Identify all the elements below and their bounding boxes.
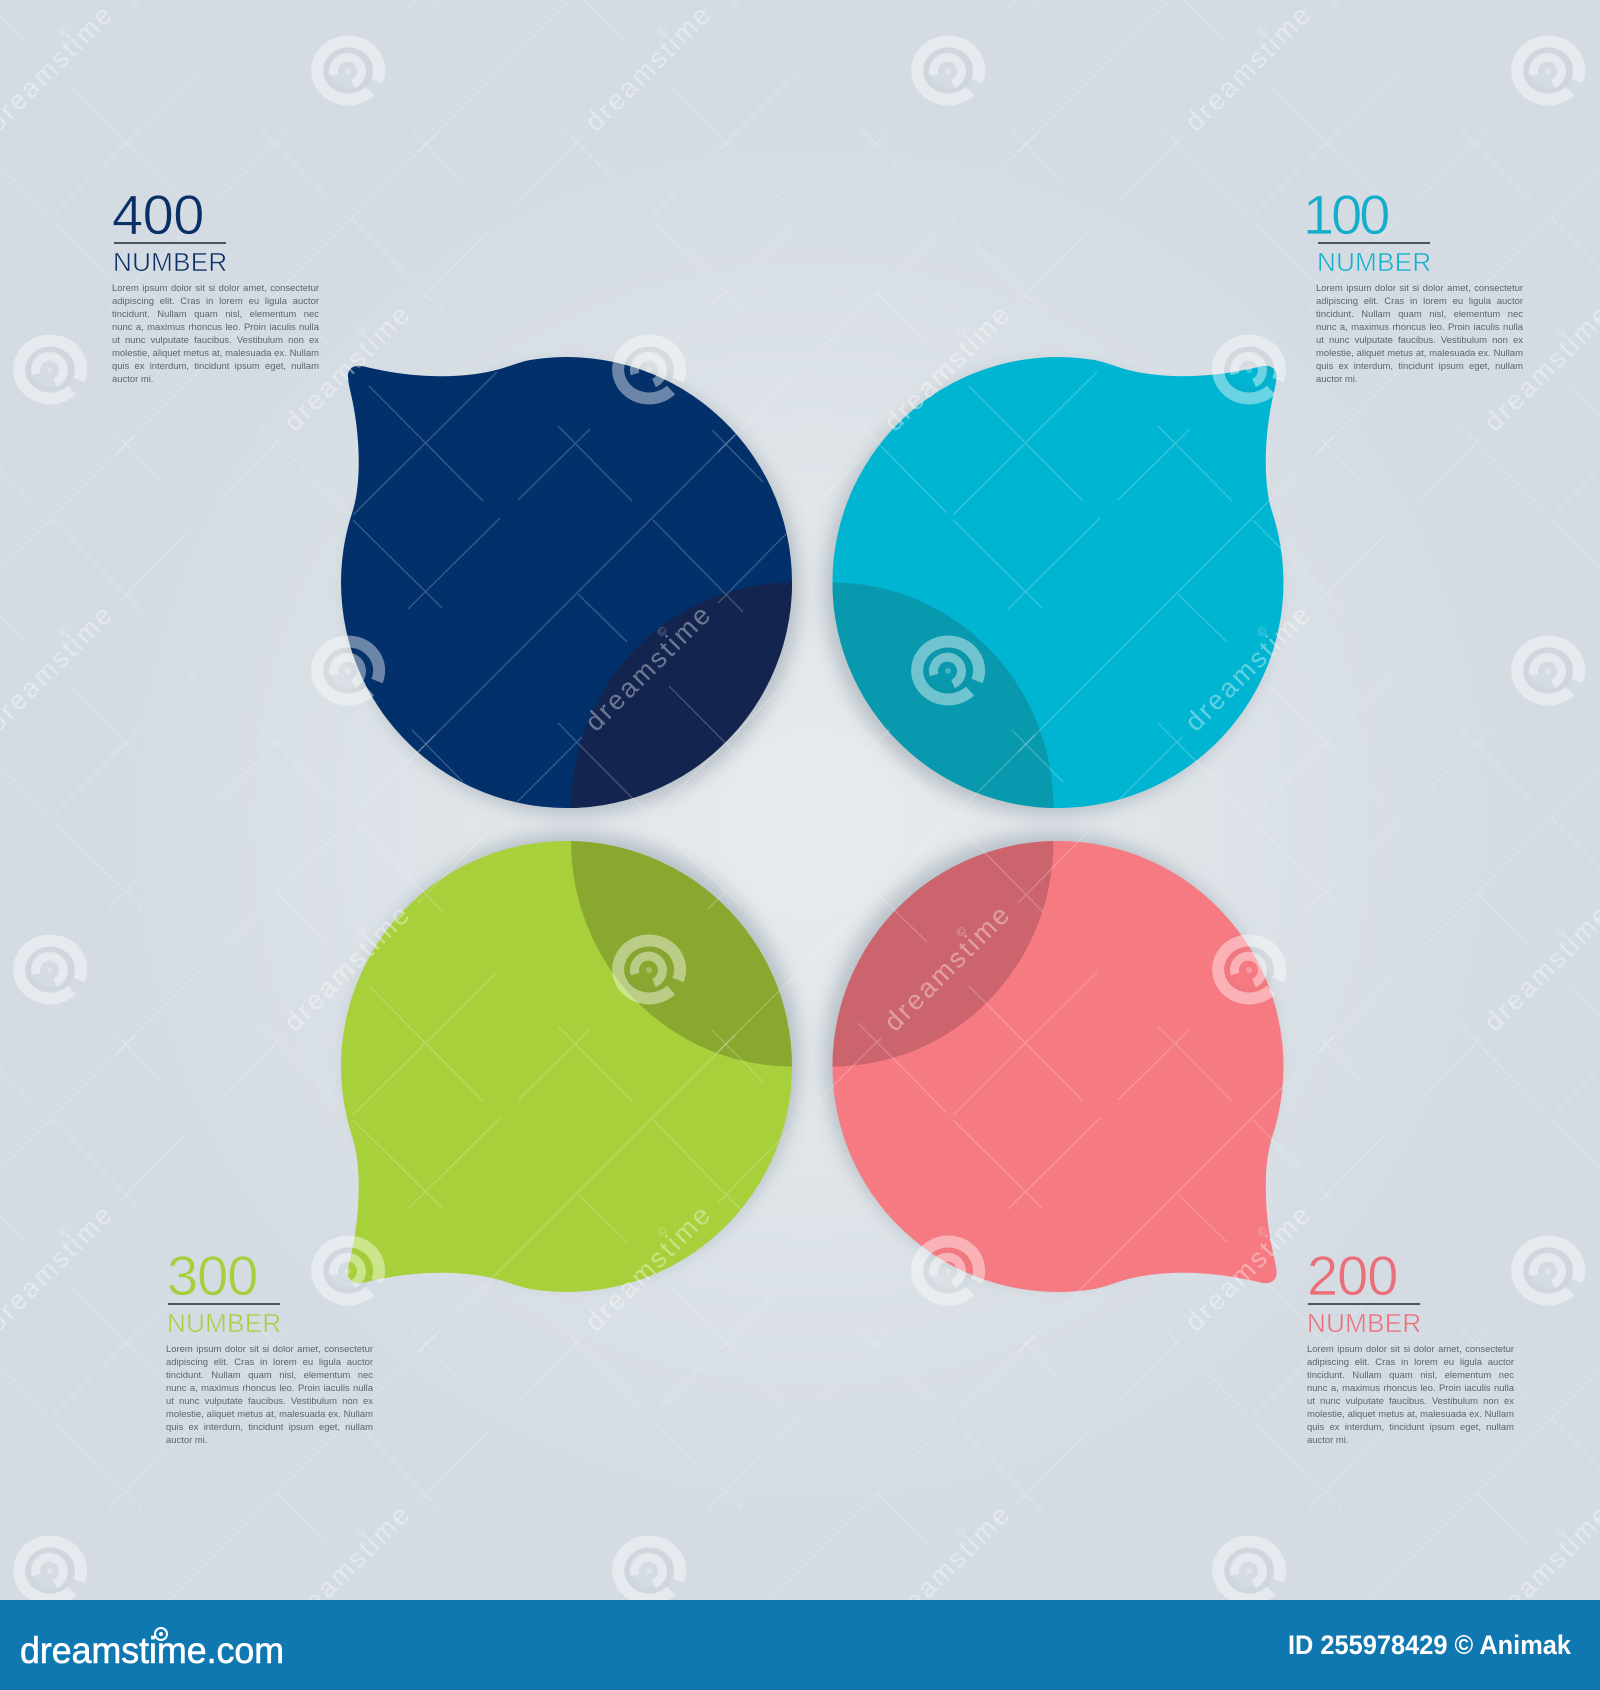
watermark: dreamstime text: © <box>953 1523 969 1540</box>
text block: 400 number, navy: Lorem ipsum dolor sit si dolor amet, consectetur <box>112 283 319 294</box>
text block: 300 number, green <box>166 1244 373 1446</box>
bubble: green, bottom left <box>341 841 792 1292</box>
text block: 300 number, green: nunc a, maximus rhoncus leo. Proin iaculis nulla <box>166 1383 373 1394</box>
text block: 200 number, pink: 200 <box>1307 1244 1397 1307</box>
text block: 400 number, navy: tincidunt. Nullam quam nisl, elementum nec <box>112 309 319 320</box>
watermark: dreamstime text: © <box>1254 623 1270 640</box>
watermark: dreamstime text: © <box>56 23 72 40</box>
text block: 300 number, green: quis ex interdum, tincidunt ipsum eget, nullam <box>166 1422 373 1433</box>
watermark: dreamstime text: dreamstime <box>579 0 716 137</box>
watermark: dreamstime text: © <box>1254 23 1270 40</box>
watermark: dreamstime text: dreamstime <box>579 600 716 737</box>
watermark: dreamstime text: dreamstime <box>278 900 415 1037</box>
watermark: dreamstime text: © <box>1254 1223 1270 1240</box>
watermark: dreamstime text: © <box>654 1223 670 1240</box>
watermark: dreamstime text: © <box>654 23 670 40</box>
watermark: dreamstime text: dreamstime <box>878 900 1015 1037</box>
text block: 100 number, cyan: nunc a, maximus rhoncus leo. Proin iaculis nulla <box>1316 322 1523 333</box>
text block: 400 number, navy <box>112 183 319 385</box>
text block: 300 number, green: tincidunt. Nullam quam nisl, elementum nec <box>166 1370 373 1381</box>
watermark: dreamstime text: © <box>654 623 670 640</box>
text block: 300 number, green: ut nunc vulputate faucibus. Vestibulum non ex <box>166 1396 373 1407</box>
text block: 100 number, cyan: adipiscing elit. Cras in lorem eu ligula auctor <box>1316 296 1523 307</box>
watermark: dreamstime text: dreamstime <box>878 1500 1015 1637</box>
text block: 100 number, cyan: quis ex interdum, tincidunt ipsum eget, nullam <box>1316 361 1523 372</box>
text block: 100 number, cyan: Lorem ipsum dolor sit si dolor amet, consectetur <box>1316 283 1523 294</box>
text block: 400 number, navy: nunc a, maximus rhoncus leo. Proin iaculis nulla <box>112 322 319 333</box>
text block: 200 number, pink: molestie, aliquet metus at, malesuada ex. Nullam <box>1307 1409 1514 1420</box>
footer bar: ID 255978429 © Animak <box>1288 1630 1571 1660</box>
bubble: pink, bottom right <box>832 841 1284 1292</box>
watermark: dreamstime text: dreamstime <box>579 1200 716 1337</box>
text block: 400 number, navy: quis ex interdum, tincidunt ipsum eget, nullam <box>112 361 319 372</box>
text block: 200 number, pink: adipiscing elit. Cras in lorem eu ligula auctor <box>1307 1357 1514 1368</box>
text block: 200 number, pink: auctor mi. <box>1307 1435 1348 1446</box>
watermark: dreamstime text: © <box>1553 1523 1569 1540</box>
watermark: dreamstime text: dreamstime <box>1179 1200 1316 1337</box>
footer bar <box>0 1600 1600 1690</box>
text block: 200 number, pink: quis ex interdum, tincidunt ipsum eget, nullam <box>1307 1422 1514 1433</box>
text block: 200 number, pink: tincidunt. Nullam quam nisl, elementum nec <box>1307 1370 1514 1381</box>
bubble: cyan, top right <box>832 357 1284 808</box>
watermark: dreamstime text: dreamstime <box>1179 0 1316 137</box>
bubble: navy, top left <box>341 357 792 808</box>
text block: 300 number, green: molestie, aliquet metus at, malesuada ex. Nullam <box>166 1409 373 1420</box>
watermark: dreamstime text: dreamstime <box>1179 600 1316 737</box>
text block: 400 number, navy: NUMBER <box>113 247 227 277</box>
watermark: dreamstime text: © <box>953 923 969 940</box>
watermark: dreamstime text: © <box>1553 923 1569 940</box>
watermark: dreamstime text: © <box>1553 323 1569 340</box>
text block: 300 number, green: Lorem ipsum dolor sit si dolor amet, consectetur <box>166 1344 373 1355</box>
text block: 200 number, pink: ut nunc vulputate faucibus. Vestibulum non ex <box>1307 1396 1514 1407</box>
watermark: dreamstime text: dreamstime <box>878 300 1015 437</box>
watermark: dreamstime text: © <box>953 323 969 340</box>
text block: 400 number, navy: molestie, aliquet metus at, malesuada ex. Nullam <box>112 348 319 359</box>
text block: 100 number, cyan <box>1303 183 1523 385</box>
text block: 200 number, pink: nunc a, maximus rhoncus leo. Proin iaculis nulla <box>1307 1383 1514 1394</box>
watermark: dreamstime text: © <box>353 1523 369 1540</box>
text block: 400 number, navy: ut nunc vulputate faucibus. Vestibulum non ex <box>112 335 319 346</box>
watermark: dreamstime text: © <box>353 323 369 340</box>
text block: 100 number, cyan: NUMBER <box>1317 247 1431 277</box>
text block: 400 number, navy: 400 <box>112 183 204 246</box>
text block: 300 number, green: auctor mi. <box>166 1435 207 1446</box>
text block: 100 number, cyan: 100 <box>1303 183 1387 246</box>
text block: 300 number, green: NUMBER <box>167 1308 281 1338</box>
text block: 200 number, pink: Lorem ipsum dolor sit si dolor amet, consectetur <box>1307 1344 1514 1355</box>
text block: 200 number, pink: NUMBER <box>1307 1308 1421 1338</box>
text block: 300 number, green: adipiscing elit. Cras in lorem eu ligula auctor <box>166 1357 373 1368</box>
watermark: dreamstime text: dreamstime <box>278 1500 415 1637</box>
shadows beneath the bubbles <box>349 365 1275 1283</box>
text block: 400 number, navy: adipiscing elit. Cras in lorem eu ligula auctor <box>112 296 319 307</box>
text block: 100 number, cyan: auctor mi. <box>1316 374 1357 385</box>
text block: 100 number, cyan: ut nunc vulputate faucibus. Vestibulum non ex <box>1316 335 1523 346</box>
text block: 100 number, cyan: molestie, aliquet metus at, malesuada ex. Nullam <box>1316 348 1523 359</box>
watermark: dreamstime text: © <box>56 1223 72 1240</box>
text block: 200 number, pink <box>1307 1244 1514 1446</box>
footer bar: dreamstime.com <box>20 1630 284 1671</box>
watermark: dreamstime text: dreamstime <box>278 300 415 437</box>
watermark: dreamstime text: © <box>353 923 369 940</box>
watermark: dreamstime text: © <box>56 623 72 640</box>
text block: 400 number, navy: auctor mi. <box>112 374 153 385</box>
text block: 300 number, green: 300 <box>167 1244 257 1307</box>
text block: 100 number, cyan: tincidunt. Nullam quam nisl, elementum nec <box>1316 309 1523 320</box>
